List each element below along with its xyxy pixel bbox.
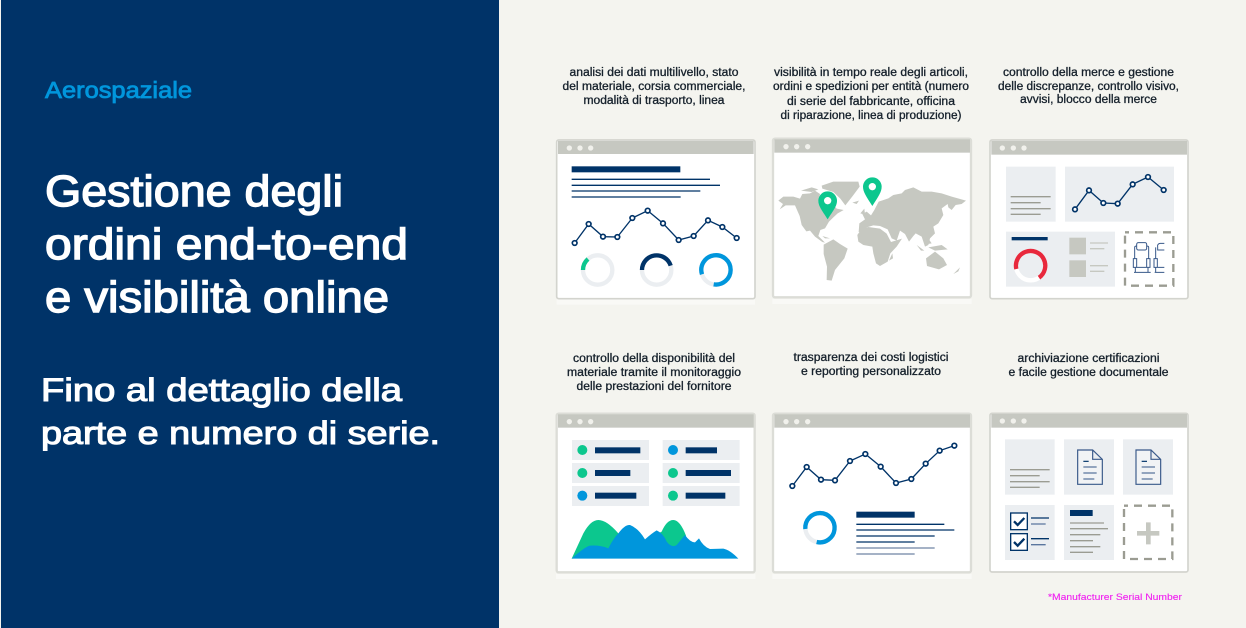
caption: real-time visibility [773,67,969,122]
caption: real-time visibility: ordini e spedizioni per entità (numero [773,81,969,93]
caption: goods control: controllo della merce e gestione [1003,67,1174,79]
donut chart [805,513,835,542]
caption: multilevel data analysis [562,67,746,107]
title [45,167,408,322]
icon: document 1 [1064,439,1114,495]
text lines [856,512,954,554]
line chart [572,208,739,245]
title: e visibilità online [45,273,389,322]
caption: goods control [998,67,1179,106]
panel: goods control window [990,140,1188,299]
status list left [572,440,649,506]
donut tile [1006,232,1115,287]
text tile with heading [1064,505,1114,560]
subtitle: Fino al dettaglio della [41,372,402,408]
world map [778,182,966,281]
caption: multilevel data analysis: analisi dei dati multilivello, stato [570,67,738,79]
panel: world map window [772,139,972,304]
line chart [790,443,957,488]
icon: location pin 2 [863,177,882,206]
title: ordini end-to-end [45,220,408,269]
panel: logistics cost window [772,414,972,579]
title: Gestione degli [45,167,343,216]
caption: logistics cost transparency: trasparenza dei costi logistici [794,352,948,364]
footnote: *Manufacturer Serial Number [1048,592,1182,603]
caption: certification archive [1008,353,1168,379]
caption: goods control: delle discrepanze, controllo visivo, [998,81,1179,93]
panel: supplier monitoring window [556,414,755,579]
text tile [1005,439,1055,495]
icon: document 2 [1123,439,1173,495]
icon: location pin 1 [818,191,837,219]
icon: aircraft seats in dashed frame [1125,232,1173,286]
caption: material availability: delle prestazioni del fornitore [576,381,732,393]
subtitle: parte e numero di serie. [41,415,440,451]
panel: documents window [990,413,1188,572]
caption: material availability [567,353,741,393]
icon: add in dashed frame [1124,506,1172,559]
subtitle [41,372,440,451]
area chart [572,520,738,559]
caption: multilevel data analysis: del materiale, corsia commerciale, [562,81,746,93]
caption: real-time visibility: di riparazione, linea di produzione) [780,110,962,122]
donut charts [583,255,731,285]
caption: real-time visibility: di serie del fabbricante, officina [787,96,956,108]
text lines [572,166,720,197]
caption: multilevel data analysis: modalità di trasporto, linea [584,95,725,107]
panel: analytics window [557,140,755,305]
caption: certification archive: archiviazione certificazioni [1018,353,1160,365]
status list right [663,440,740,506]
icon: checklist [1005,505,1055,560]
caption: logistics cost transparency [794,352,948,378]
caption: material availability: materiale tramite il monitoraggio [567,367,741,379]
caption: real-time visibility: visibilità in tempo reale degli articoli, [774,67,968,79]
caption: logistics cost transparency: e reporting personalizzato [801,366,941,378]
caption: certification archive: e facile gestione documentale [1008,367,1168,379]
category label: Aerospaziale [45,77,192,103]
caption: material availability: controllo della disponibilità del [573,353,735,365]
panel: left title panel [1,0,499,628]
text tile [1006,167,1056,222]
line chart tile [1065,167,1174,222]
caption: goods control: avvisi, blocco della merce [1020,94,1157,106]
